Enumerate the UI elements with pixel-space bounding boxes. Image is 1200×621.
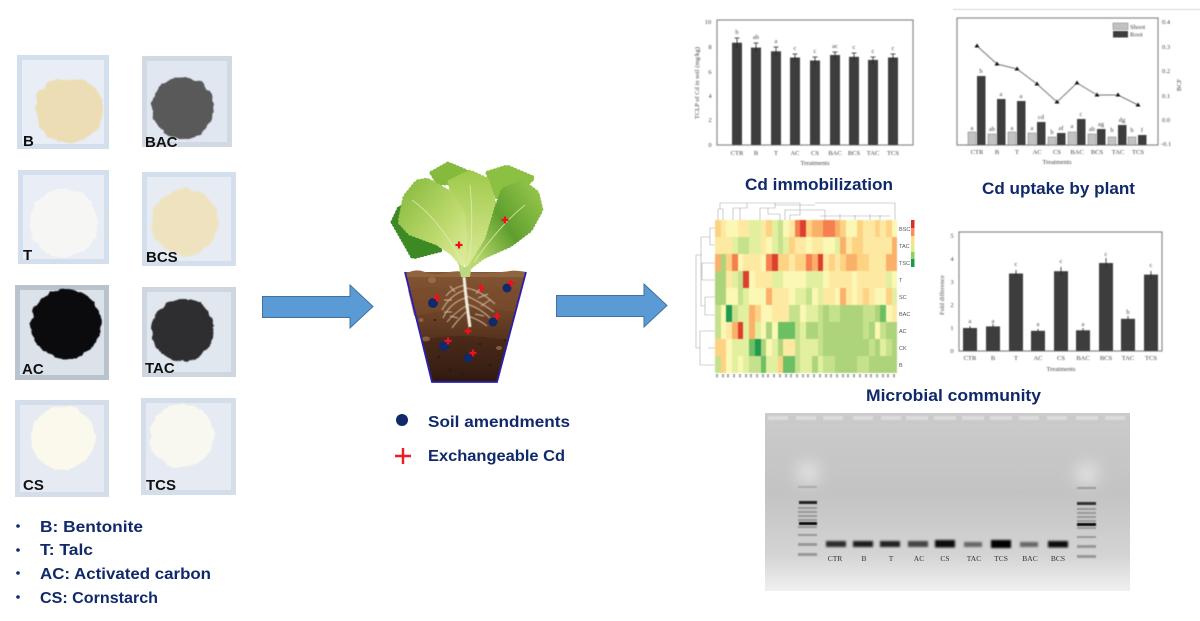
key: abbreviations list	[16, 519, 211, 607]
chart: fold difference bars: c	[1015, 261, 1018, 268]
gel lane labels: AC	[914, 554, 924, 563]
chart: TCLP of Cd in soil bars: c	[853, 44, 856, 51]
chart: Cd uptake by plant bars and BCF line: Shoot	[1130, 24, 1145, 31]
panel: amendment sample photos	[15, 55, 236, 497]
chart: Cd uptake by plant bars and BCF line: a	[1000, 91, 1003, 98]
chart: Cd uptake by plant bars and BCF line: 0.0	[1162, 117, 1170, 124]
chart: fold difference bars: 0	[950, 348, 954, 355]
chart: TCLP of Cd in soil bars: 6	[708, 69, 712, 76]
heatmap colour scale	[911, 220, 914, 267]
heatmap row labels: SC	[899, 295, 907, 301]
chart: TCLP of Cd in soil bars: B	[754, 150, 759, 157]
chart: fold difference bars: Treatments	[1046, 366, 1076, 373]
chart: TCLP of Cd in soil bars: 4	[708, 93, 712, 100]
key: abbreviations list: T: Talc	[40, 542, 93, 559]
pot of soil	[405, 270, 526, 382]
chart: Cd uptake by plant bars and BCF line: b	[979, 68, 983, 75]
chart: Cd uptake by plant bars and BCF line: ab	[1089, 126, 1095, 133]
chart: TCLP of Cd in soil bars: 10	[705, 19, 711, 26]
chart: fold difference bars: 4	[950, 256, 954, 263]
photo: bentonite B: B	[23, 133, 34, 150]
chart: Cd uptake by plant bars and BCF line: a	[1031, 125, 1034, 132]
chart: Cd uptake by plant bars and BCF line: 0.1	[1162, 93, 1170, 100]
photo: activated carbon AC	[15, 285, 109, 380]
heading: Cd immobilization: Cd immobilization	[745, 175, 893, 194]
chart: fold difference bars: 1	[950, 325, 954, 332]
chart: TCLP of Cd in soil bars: BAC	[828, 150, 842, 157]
chart: Cd uptake by plant bars and BCF line: B	[995, 149, 1000, 156]
chart: Cd uptake by plant bars and BCF line: cd	[1038, 114, 1045, 121]
chart: TCLP of Cd in soil bars: T	[774, 150, 778, 157]
gel lane labels: CS	[940, 554, 950, 563]
gel lane labels: CTR	[828, 554, 842, 563]
chart: TCLP of Cd in soil bars: TAC	[867, 150, 879, 157]
chart: TCLP of Cd in soil bars: CTR	[731, 150, 744, 157]
chart: TCLP of Cd in soil bars: c	[814, 48, 817, 55]
chart: Cd uptake by plant bars and BCF line: CS	[1053, 149, 1061, 156]
chart: Cd uptake by plant bars and BCF line: T	[1015, 149, 1019, 156]
chart: Cd uptake by plant bars and BCF line: a	[1011, 125, 1014, 132]
lettuce leaves	[393, 164, 541, 267]
heatmap row labels: BAC	[899, 312, 910, 318]
chart: Cd uptake by plant bars and BCF line: ab	[989, 126, 995, 133]
photo: TCS: TCS	[146, 477, 176, 494]
heatmap row labels: TSC	[899, 261, 910, 267]
heatmap column ticks	[717, 374, 894, 378]
chart: Cd uptake by plant bars and BCF line: CTR	[971, 149, 984, 156]
chart: fold difference bars: TCS	[1145, 355, 1157, 362]
heatmap row labels: T	[899, 278, 903, 284]
chart: Cd uptake by plant bars and BCF line: b	[1130, 127, 1134, 134]
chart: Cd uptake by plant bars and BCF line: TCS	[1132, 149, 1144, 156]
chart: fold difference bars: c	[1060, 258, 1063, 265]
chart: TCLP of Cd in soil bars: c	[794, 45, 797, 52]
chart: TCLP of Cd in soil bars: 2	[708, 117, 712, 124]
chart: fold difference bars: CS	[1057, 355, 1065, 362]
chart: Cd uptake by plant bars and BCF line: 0.2	[1162, 68, 1170, 75]
chart: TCLP of Cd in soil bars: ac	[832, 43, 838, 50]
chart: fold difference bars: 3	[950, 279, 954, 286]
chart: Cd uptake by plant bars and BCF line: af	[1058, 125, 1064, 132]
chart: Cd uptake by plant bars and BCF line: c	[1080, 111, 1083, 118]
chart: fold difference bars: BCS	[1100, 355, 1113, 362]
chart: Cd uptake by plant bars and BCF line: ag	[1098, 121, 1105, 128]
chart: fold difference bars	[939, 232, 1162, 373]
photo: bentonite B	[17, 55, 109, 150]
gel lane labels: T	[889, 554, 894, 563]
chart: fold difference bars: a	[992, 318, 995, 325]
chart: TCLP of Cd in soil bars: a	[775, 38, 778, 45]
arrow: plant to results	[556, 284, 667, 327]
photo: TAC: TAC	[145, 360, 175, 377]
chart: TCLP of Cd in soil bars: TCLP of Cd in soil (mg/kg)	[694, 47, 701, 119]
key: abbreviations list: AC: Activated carbon	[40, 566, 211, 583]
gel lane labels: TCS	[994, 554, 1008, 563]
gel lane labels: BAC	[1022, 554, 1038, 563]
chart: Cd uptake by plant bars and BCF line: a	[971, 125, 974, 132]
chart: TCLP of Cd in soil bars: 8	[708, 44, 712, 51]
chart: TCLP of Cd in soil bars: TCS	[887, 150, 899, 157]
chart: TCLP of Cd in soil bars: c	[892, 45, 895, 52]
photo: TAC	[142, 287, 236, 377]
photo: BCS	[142, 172, 236, 266]
gel electrophoresis image	[765, 413, 1130, 591]
chart: fold difference bars: 2	[950, 302, 954, 309]
legend: soil amendments: Soil amendments	[428, 414, 570, 431]
chart: Cd uptake by plant bars and BCF line: BAC	[1070, 149, 1084, 156]
chart: fold difference bars: AC	[1033, 355, 1043, 362]
arrow: samples to plant	[262, 285, 373, 328]
chart: TCLP of Cd in soil bars: 0	[708, 142, 712, 149]
gel lane labels: BCS	[1051, 554, 1065, 563]
illustration: lettuce in soil pot	[393, 164, 541, 382]
chart: TCLP of Cd in soil bars: c	[872, 48, 875, 55]
plant roots	[442, 277, 495, 328]
chart: fold difference bars: 5	[950, 233, 954, 240]
heading: Microbial community: Microbial community	[866, 386, 1042, 405]
chart: TCLP of Cd in soil bars: Treatments	[800, 160, 830, 167]
chart: Cd uptake by plant bars and BCF line: BCS	[1091, 149, 1104, 156]
photo: activated carbon AC: AC	[22, 361, 44, 378]
photo: cornstarch CS	[15, 400, 109, 497]
legend: exchangeable Cd: Exchangeable Cd	[428, 448, 565, 465]
chart: Cd uptake by plant bars and BCF line	[953, 10, 1200, 166]
heatmap dendrograms	[696, 203, 895, 365]
chart: Cd uptake by plant bars and BCF line: BCF	[1176, 78, 1183, 91]
chart: TCLP of Cd in soil bars: b	[735, 29, 739, 36]
key: abbreviations list: CS: Cornstarch	[40, 590, 158, 607]
chart: fold difference bars: a	[1082, 321, 1085, 328]
heatmap: microbial community	[696, 202, 914, 378]
photo: BCS: BCS	[146, 249, 178, 266]
chart: Cd uptake by plant bars and BCF line: dg	[1119, 117, 1126, 124]
photo: BAC: BAC	[145, 134, 178, 151]
chart: TCLP of Cd in soil bars: BCS	[848, 150, 861, 157]
heatmap row labels	[899, 227, 910, 369]
ladders	[798, 486, 1096, 558]
chart: fold difference bars: a	[969, 318, 972, 325]
chart: Cd uptake by plant bars and BCF line: b	[1050, 129, 1054, 136]
gel lane labels: TAC	[967, 554, 981, 563]
heatmap row labels: BSC	[899, 227, 910, 233]
chart: Cd uptake by plant bars and BCF line: 0.3	[1162, 44, 1170, 51]
photo: TCS	[141, 398, 236, 495]
heading: Cd uptake by plant: Cd uptake by plant	[982, 179, 1135, 198]
exchangeable Cd markers	[434, 216, 514, 356]
chart: Cd uptake by plant bars and BCF line: -0.1	[1161, 141, 1171, 148]
chart: fold difference bars: c	[1105, 251, 1108, 258]
heatmap row labels: CK	[899, 346, 907, 352]
sample bands	[826, 540, 1068, 548]
photo: BAC	[142, 56, 232, 151]
heatmap row labels: B	[899, 363, 903, 369]
chart: fold difference bars: CTR	[964, 355, 977, 362]
chart: fold difference bars: T	[1014, 355, 1018, 362]
chart: Cd uptake by plant bars and BCF line: f	[1141, 127, 1144, 134]
chart: fold difference bars: b	[1126, 309, 1130, 316]
chart: Cd uptake by plant bars and BCF line: AC	[1032, 149, 1042, 156]
chart: Cd uptake by plant bars and BCF line: Treatments	[1042, 159, 1072, 166]
gel lane labels: B	[861, 554, 867, 563]
chart: fold difference bars: Fold difference	[939, 275, 946, 315]
chart: TCLP of Cd in soil bars: CS	[811, 150, 819, 157]
chart: TCLP of Cd in soil bars: AC	[790, 150, 800, 157]
chart: Cd uptake by plant bars and BCF line: TAC	[1112, 149, 1124, 156]
chart: Cd uptake by plant bars and BCF line: b	[1110, 127, 1114, 134]
photo: talc T	[18, 170, 109, 264]
chart: fold difference bars: c	[1150, 262, 1153, 269]
heatmap row labels: TAC	[899, 244, 910, 250]
heatmap row labels: AC	[899, 329, 907, 335]
chart: Cd uptake by plant bars and BCF line: a	[1071, 123, 1074, 130]
chart: fold difference bars: BAC	[1076, 355, 1090, 362]
chart: fold difference bars: a	[1037, 321, 1040, 328]
chart: fold difference bars: B	[991, 355, 996, 362]
soil amendment dots	[428, 284, 512, 362]
gel lane labels	[828, 554, 1065, 563]
photo: cornstarch CS: CS	[23, 477, 44, 494]
chart: TCLP of Cd in soil bars: ab	[753, 34, 759, 41]
chart: TCLP of Cd in soil bars	[694, 19, 913, 167]
key: abbreviations list: B: Bentonite	[40, 519, 143, 536]
chart: fold difference bars: TAC	[1122, 355, 1134, 362]
photo: talc T: T	[23, 247, 32, 264]
chart: Cd uptake by plant bars and BCF line: Root	[1130, 32, 1143, 38]
chart: Cd uptake by plant bars and BCF line: a	[1020, 93, 1023, 100]
chart: Cd uptake by plant bars and BCF line: 0.4	[1162, 19, 1171, 26]
gel wells	[768, 416, 1125, 420]
